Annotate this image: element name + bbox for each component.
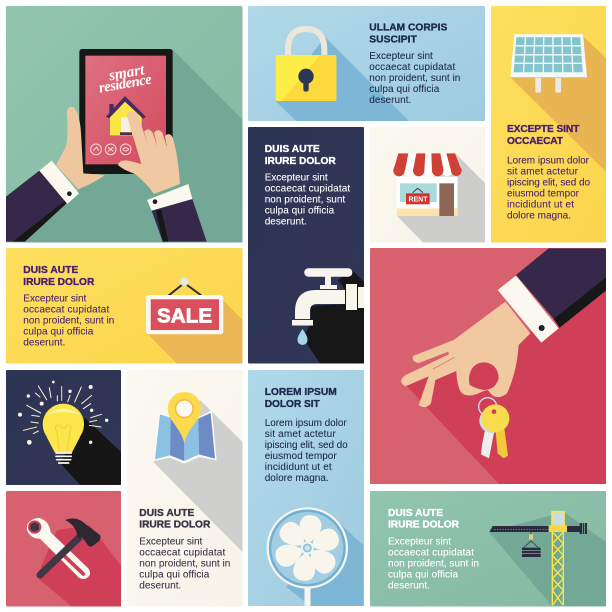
panel: crane — [370, 491, 606, 606]
heading — [369, 23, 448, 46]
body text: non proident, sunt in — [388, 558, 479, 569]
body text: culpa qui officia — [139, 569, 210, 580]
sparkles — [18, 381, 108, 445]
body text — [265, 173, 350, 228]
icon: sale sign: SALE — [157, 304, 212, 328]
hammer — [40, 518, 101, 575]
heading: SUSCIPIT — [369, 35, 418, 46]
body text: culpa qui officia — [388, 569, 458, 580]
body text — [265, 418, 348, 484]
body text: deserunt. — [369, 95, 411, 106]
panel: tools — [6, 491, 121, 606]
body text: occaecat cupidatat — [23, 305, 110, 316]
heading: DUIS AUTE — [265, 144, 320, 155]
long shadow — [146, 300, 242, 364]
rays — [23, 386, 102, 434]
body text: incididunt ut et — [507, 199, 574, 210]
heading: IRURE DOLOR — [139, 520, 211, 531]
icon: tower crane — [489, 512, 587, 605]
left sleeve — [6, 161, 79, 242]
body text: deserunt. — [139, 580, 181, 591]
panel: lock — [248, 6, 485, 121]
icon: light bulb — [18, 381, 108, 463]
sleeve — [498, 248, 606, 343]
long shadow — [489, 512, 606, 606]
body text — [369, 51, 460, 106]
body text — [388, 536, 479, 591]
panel: faucet — [248, 127, 364, 364]
icon: faucet — [292, 268, 364, 345]
panel: solar panel — [491, 6, 606, 242]
body text: non proident, sunt in — [139, 558, 230, 569]
body text: eiusmod tempor — [265, 451, 337, 462]
mast — [552, 532, 563, 605]
long shadow — [303, 270, 364, 364]
heading: DUIS AUTE — [388, 508, 443, 519]
long shadow — [25, 49, 242, 242]
heading: DUIS AUTE — [23, 265, 79, 276]
body text: deserunt. — [265, 217, 307, 228]
body text — [23, 294, 114, 349]
body text: occaecat cupidatat — [369, 62, 456, 73]
left hand — [56, 107, 105, 189]
icon: map with pin — [153, 392, 217, 464]
body text: ipiscing elit, sed do — [507, 177, 590, 188]
heading — [265, 387, 337, 410]
wrench — [27, 518, 90, 579]
keys — [479, 398, 509, 458]
app icons — [91, 144, 131, 155]
long shadow — [276, 37, 409, 121]
heading: IRURE DOLOR — [23, 277, 95, 288]
long shadow — [401, 290, 606, 484]
body text: occaecat cupidatat — [388, 547, 474, 558]
icon: padlock — [276, 29, 336, 101]
long shadow — [510, 37, 606, 172]
heading — [23, 265, 95, 288]
long shadow — [60, 418, 121, 485]
panel: hand with keys — [370, 248, 606, 484]
icon: fan — [267, 507, 348, 606]
heading — [507, 124, 580, 147]
hook and load — [522, 532, 541, 557]
heading: OCCAECAT — [507, 136, 564, 147]
panel: sale sign — [6, 248, 242, 364]
body text: occaecat cupidatat — [265, 184, 350, 195]
right hand — [118, 111, 180, 194]
body text: incididunt ut et — [265, 462, 332, 473]
rent sign: RENT — [408, 197, 428, 204]
panel: smart residence tablet — [6, 6, 243, 242]
body text: non proident, sunt — [265, 195, 345, 206]
body text: sit amet actetur — [265, 429, 336, 440]
heading: DUIS AUTE — [139, 508, 195, 519]
panel: fan — [248, 370, 364, 606]
body text: Excepteur sint — [23, 294, 87, 305]
body text: ipiscing elit, sed do — [265, 440, 348, 451]
heading: DOLOR SIT — [265, 399, 320, 410]
heading — [139, 508, 211, 531]
panel: map pin — [127, 370, 242, 606]
heading: LOREM IPSUM — [265, 387, 337, 398]
illustration: hands holding tablet — [6, 49, 207, 242]
body text: Excepteur sint — [388, 536, 451, 547]
body text: culpa qui officia — [265, 206, 335, 217]
pin — [168, 392, 201, 443]
body text: occaecat cupidatat — [139, 547, 226, 558]
illustration: hand and keys — [401, 248, 606, 458]
body text: Excepteur sint — [265, 173, 328, 184]
body text — [507, 155, 590, 221]
body text: non proident, sunt in — [23, 316, 114, 327]
fan blades — [273, 514, 342, 582]
icon: sale sign — [146, 277, 223, 334]
body text: deserunt. — [388, 580, 430, 591]
heading: EXCEPTE SINT — [507, 124, 580, 135]
body text: dolore magna. — [265, 473, 329, 484]
long shadow — [37, 525, 121, 606]
heading: IRURE DOLOR — [388, 520, 460, 531]
icon: wrench and hammer — [27, 518, 101, 579]
tablet app title: residence — [98, 71, 153, 97]
body text — [139, 536, 230, 591]
body text: deserunt. — [23, 338, 65, 349]
body text: Excepteur sint — [139, 536, 203, 547]
tablet app title: smart — [107, 61, 146, 84]
heading — [388, 508, 460, 531]
tablet — [79, 49, 173, 174]
body text: Lorem ipsum dolor — [265, 418, 347, 429]
long shadow — [397, 153, 485, 242]
heading: ULLAM CORPIS — [369, 23, 448, 34]
right sleeve — [147, 184, 207, 242]
body text: culpa qui officia — [369, 84, 440, 95]
body text: Lorem ipsum dolor — [507, 155, 590, 166]
awning — [393, 153, 462, 176]
icon: solar panel — [510, 34, 587, 92]
icon: water drop — [297, 329, 308, 345]
panel: rental shop — [370, 127, 485, 242]
body text: culpa qui officia — [23, 327, 94, 338]
hand — [401, 302, 530, 407]
body text: sit amet actetur — [507, 166, 579, 177]
long shadow — [286, 519, 364, 606]
body text: dolore magna. — [507, 210, 571, 221]
heading — [265, 144, 336, 167]
body text: eiusmod tempor — [507, 188, 580, 199]
body text: Excepteur sint — [369, 51, 433, 62]
icon: house — [106, 96, 146, 135]
long shadow — [153, 400, 242, 552]
body text: non proident, sunt in — [369, 73, 460, 84]
heading: IRURE DOLOR — [265, 156, 336, 167]
panel: light bulb — [6, 370, 121, 485]
